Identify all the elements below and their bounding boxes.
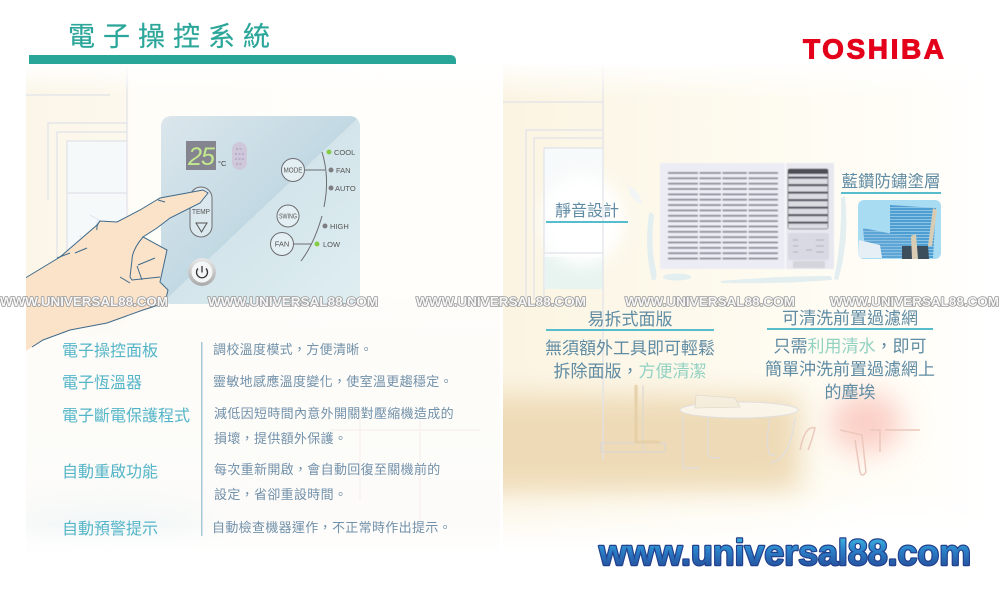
row labels: 電子恆溫器 [62, 374, 142, 392]
feature: washable pre-filter: 只需利用清水，即可 [774, 337, 926, 356]
callout: quiet design: 靜音設計 [555, 202, 619, 220]
mode button group: MODE [284, 166, 302, 174]
temp button [190, 187, 212, 237]
feature: removable panel: 拆除面版，方便清潔 [554, 362, 706, 381]
list divider [201, 342, 202, 536]
row descriptions [212, 342, 454, 535]
speaker grille [232, 142, 247, 170]
feature: removable panel [545, 310, 715, 381]
watermarks: WWW.UNIVERSAL88.COM [416, 294, 586, 309]
watermarks: WWW.UNIVERSAL88.COM [0, 294, 168, 309]
feature: washable pre-filter: 簡單沖洗前置過濾網上 [765, 359, 935, 379]
temp button: TEMP [192, 207, 210, 216]
temperature display: °C [218, 159, 227, 168]
feature: washable pre-filter: 的塵埃 [824, 383, 876, 402]
feature: removable panel: 無須額外工具即可輕鬆 [545, 338, 715, 358]
title: 電子操控系統 [68, 22, 278, 52]
feature: washable pre-filter: 可清洗前置過濾網 [782, 309, 918, 328]
feature: washable pre-filter [765, 309, 935, 402]
fan button group: HIGH [330, 222, 349, 231]
temperature display [186, 141, 227, 171]
row labels: 自動重啟功能 [62, 463, 158, 481]
swing button [277, 205, 299, 227]
fan button group [270, 216, 349, 261]
row descriptions: 調校溫度模式，方便清晰。 [213, 342, 373, 357]
title bar [29, 55, 456, 64]
front grille [668, 172, 778, 260]
air flow swirls [628, 186, 846, 283]
hand pressing temp button [18, 190, 208, 356]
watermarks: WWW.UNIVERSAL88.COM [625, 294, 795, 309]
unit control panel [788, 233, 829, 268]
mode button group: COOL [334, 148, 355, 157]
row descriptions: 損壞，提供額外保護。 [214, 431, 347, 446]
furniture: table and books [680, 395, 798, 468]
watermarks: WWW.UNIVERSAL88.COM [830, 294, 999, 309]
callout: blue fin coating: 藍鑽防鏽塗層 [842, 172, 940, 191]
air outlet louvers [788, 169, 828, 229]
row descriptions: 減低因短時間內意外開關對壓縮機造成的 [214, 406, 454, 421]
mode button group: FAN [336, 166, 351, 175]
furniture: pink chair legs [800, 428, 920, 475]
website url: www.universal88.com [598, 532, 971, 573]
fan button group: LOW [323, 240, 341, 249]
row descriptions: 設定，省卻重設時間。 [214, 487, 347, 502]
panel: right room background [503, 70, 928, 534]
panel: left room background [26, 72, 480, 532]
row labels: 電子斷電保護程式 [62, 407, 190, 425]
row descriptions: 靈敏地感應溫度變化，使室溫更趨穩定。 [213, 374, 453, 389]
temperature display: 25 [187, 143, 215, 171]
row descriptions: 每次重新開啟，會自動回復至關機前的 [214, 462, 441, 477]
logo: TOSHIBA: TOSHIBA [803, 34, 944, 64]
watermarks: WWW.UNIVERSAL88.COM [208, 294, 378, 309]
feature: removable panel: 易拆式面版 [588, 310, 672, 329]
swing button: SWING [279, 214, 297, 220]
callout: quiet design [546, 202, 628, 223]
fan button group: FAN [275, 240, 289, 248]
row labels: 電子操控面板 [62, 342, 158, 360]
row descriptions: 自動檢查機器運作，不正常時作出提示。 [212, 520, 452, 535]
row labels [62, 342, 190, 538]
photo: blue coated fins [858, 200, 941, 259]
power button [188, 258, 216, 286]
mode button group: AUTO [335, 184, 356, 193]
control panel [161, 116, 360, 304]
mode button group [282, 148, 356, 207]
row labels: 自動預警提示 [62, 520, 158, 538]
watermarks [0, 294, 999, 309]
feature list [62, 342, 454, 538]
air conditioner [660, 163, 834, 269]
